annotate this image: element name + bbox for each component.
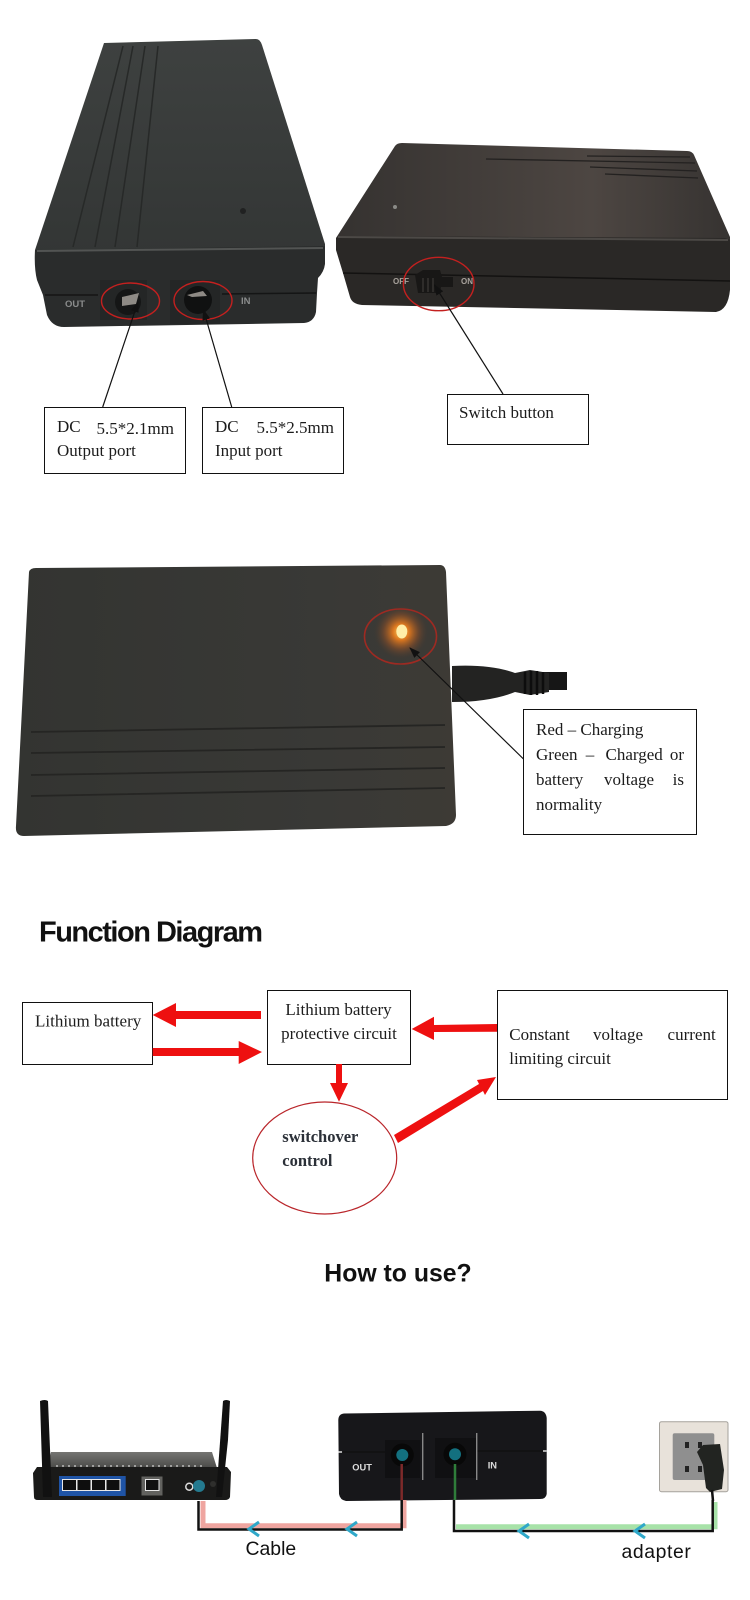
box: constant voltage circuit: Constant: [509, 1025, 570, 1044]
callout: LED meaning: Red – Charging: [536, 720, 644, 739]
arrow: switchover to voltage circuit: [394, 1077, 496, 1143]
cable: adapter to input port: [454, 1464, 715, 1531]
callout: LED meaning: is: [673, 770, 684, 789]
callout: input port: 5.5*2.5mm: [256, 418, 334, 437]
ellipse: switchover control: control: [282, 1151, 333, 1170]
box: protective circuit: [268, 990, 410, 1064]
output jack: [391, 1444, 414, 1466]
arrow: battery to protective circuit: [153, 1041, 262, 1064]
heading: How to use?: How to use?: [324, 1260, 472, 1288]
callout: output port: DC: [57, 417, 81, 436]
arrow: protective circuit to switchover: [330, 1064, 348, 1102]
red highlight circle on LED: [364, 609, 436, 664]
label: OUT: OUT: [65, 299, 85, 310]
battery unit: [338, 1411, 547, 1501]
callout: LED meaning: normality: [536, 795, 603, 814]
callout: LED meaning: [524, 710, 696, 834]
box: protective circuit: Lithium battery: [285, 1000, 392, 1019]
callout: LED meaning: Green: [536, 745, 578, 764]
box: constant voltage circuit: [498, 990, 728, 1100]
pointer arrows to ports and switch: [103, 285, 503, 407]
arrow: voltage circuit to protective circuit: [412, 1017, 497, 1040]
label: OUT on unit: OUT: [352, 1463, 372, 1473]
callout: switch button: [448, 394, 588, 444]
callout: LED meaning: –: [585, 745, 595, 764]
callout: LED meaning: voltage: [604, 770, 654, 789]
box: constant voltage circuit: limiting circuit: [509, 1049, 611, 1068]
label: OFF: OFF: [393, 277, 409, 286]
function diagram: [22, 990, 728, 1214]
box: constant voltage circuit: voltage: [593, 1025, 643, 1044]
photo: battery side view with switch: [336, 143, 730, 312]
wall socket with adapter: [660, 1422, 728, 1501]
callout: input port: Input port: [215, 441, 283, 460]
callout: output port: 5.5*2.1mm: [96, 419, 174, 438]
flow arrows: [249, 1522, 645, 1538]
input jack: [444, 1443, 466, 1466]
connection diagram: [33, 1400, 728, 1563]
label: Cable: Cable: [246, 1538, 296, 1560]
callout: switch button: Switch button: [459, 403, 554, 422]
label: adapter: adapter: [622, 1541, 691, 1563]
callout: LED meaning: Charged: [606, 745, 663, 764]
photo: battery front view with ports: [35, 39, 325, 327]
callout: input port: [202, 408, 344, 474]
photo: battery top view with LED and plug: [16, 565, 567, 836]
box: protective circuit: protective circuit: [281, 1024, 397, 1043]
router: [33, 1400, 231, 1500]
label: IN on unit: IN: [488, 1461, 497, 1471]
callout: output port: Output port: [57, 441, 136, 460]
heading: Function Diagram: Function Diagram: [39, 916, 262, 948]
callout: LED meaning: or: [670, 745, 684, 764]
callout: input port: DC: [215, 417, 239, 436]
callout: output port: [44, 408, 186, 474]
red highlight circles on ports and switch: [102, 257, 474, 320]
label: ON: ON: [461, 277, 473, 286]
cable: router to output port: [198, 1464, 404, 1530]
box: lithium battery: [22, 1002, 152, 1064]
arrow: protective circuit to battery: [153, 1003, 261, 1027]
callout: LED meaning: battery: [536, 770, 584, 789]
label: IN: IN: [241, 296, 251, 307]
pointer arrow to LED: [410, 648, 524, 759]
ellipse: switchover control: switchover: [282, 1127, 358, 1146]
box: lithium battery: Lithium battery: [35, 1012, 142, 1030]
box: constant voltage circuit: current: [668, 1025, 716, 1044]
ellipse: switchover control: [253, 1102, 397, 1214]
